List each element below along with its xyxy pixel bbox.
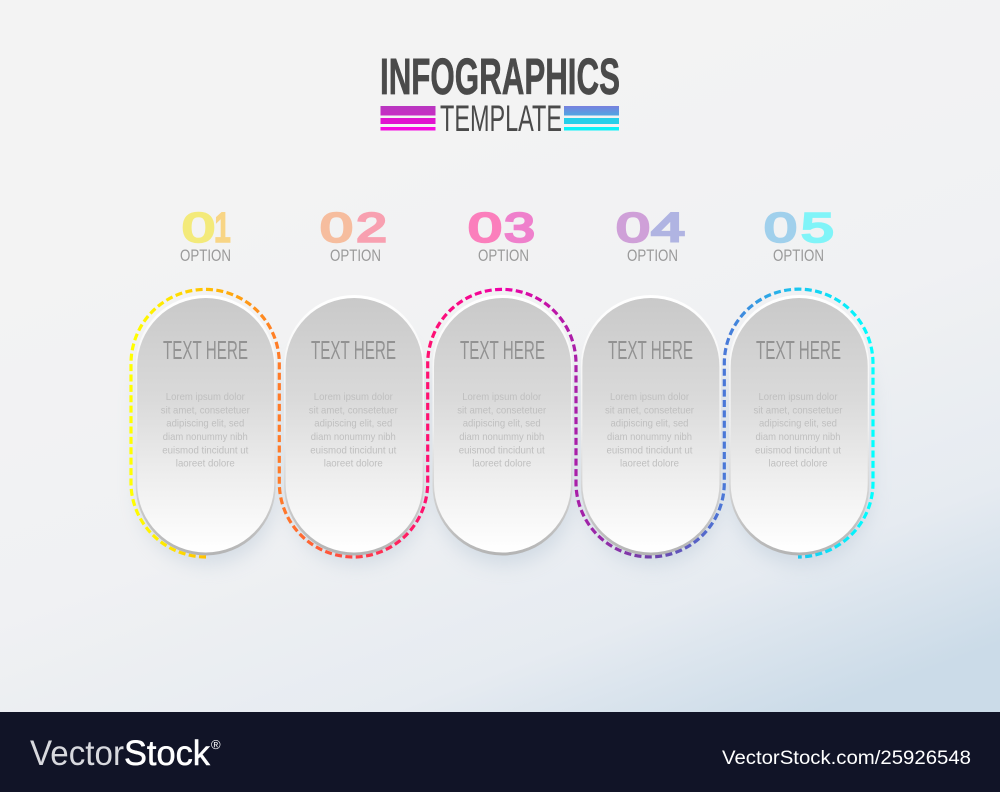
body text 3: Lorem ipsum dolor [462,391,542,403]
body text 1: sit amet, consetetuer [161,404,250,416]
footer logo: Stock [124,734,210,773]
option 02: 2 [356,205,387,251]
option 03 [468,205,535,265]
body text 5 [754,391,843,470]
option 01: 0 [182,205,215,251]
body text 2: euismod tincidunt ut [310,444,396,456]
registered mark: ® [211,737,221,752]
body text 1: laoreet dolore [176,458,235,470]
panel: capsule 1 [136,295,276,556]
footer bar [0,712,1000,792]
option 04: 4 [651,205,685,251]
body text 5: euismod tincidunt ut [755,444,841,456]
body text 4: diam nonummy nibh [607,431,692,443]
heading 1: TEXT HERE [163,335,248,365]
title [380,48,620,139]
body text 2: laoreet dolore [324,458,383,470]
dashed connector line [131,289,873,557]
body text 2: adipiscing elit, sed [314,418,392,430]
panel: capsule 2 [284,295,424,556]
body text 2: sit amet, consetetuer [309,404,398,416]
body text 4: euismod tincidunt ut [606,444,693,456]
body text 4 [605,391,694,470]
body text 5: diam nonummy nibh [756,431,841,443]
option 02: OPTION [330,247,381,265]
subtitle: template: TEMPLATE [440,98,562,139]
heading 2: TEXT HERE [311,335,396,365]
option labels [180,205,834,265]
heading 4: TEXT HERE [608,335,693,365]
option 05: 5 [801,205,834,251]
body text 2 [309,391,398,470]
option 03: 0 [468,205,502,251]
body text 4: Lorem ipsum dolor [610,391,689,403]
option 01: 1 [214,205,231,251]
body text 4: sit amet, consetetuer [605,404,694,416]
option 03: OPTION [478,247,529,265]
footer logo [30,734,210,773]
option 05 [764,205,834,265]
body text 5: adipiscing elit, sed [759,418,837,430]
title: infographics: INFOGRAPHICS [380,48,620,105]
panel: capsule 4 [581,295,721,556]
capsule shadows [139,330,870,564]
option 04 [616,205,685,265]
panel: capsule 5 [729,295,869,556]
body text 3: diam nonummy nibh [459,431,544,443]
body text 5: laoreet dolore [768,458,828,470]
heading 5: TEXT HERE [756,335,841,365]
left title stripes [380,106,436,130]
body text 3: sit amet, consetetuer [457,404,547,416]
option 01: OPTION [180,247,231,265]
option 04: 0 [616,205,650,251]
option 05: OPTION [773,247,824,265]
footer logo: Vector [30,734,124,773]
body text 5: Lorem ipsum dolor [758,391,838,403]
body text 1: euismod tincidunt ut [162,444,248,456]
heading 3: TEXT HERE [460,335,545,365]
option 04: OPTION [627,247,678,265]
body text 4: laoreet dolore [620,458,679,470]
body text 1: diam nonummy nibh [163,431,248,443]
footer image id: VectorStock.com/25926548 [722,747,971,769]
option 03: 3 [504,205,535,251]
body text 4: adipiscing elit, sed [610,418,689,430]
option 02: 0 [320,205,353,251]
option 01 [180,205,231,265]
body text 3: adipiscing elit, sed [463,418,541,430]
body text 1 [161,391,250,470]
option 02 [320,205,387,265]
body text 5: sit amet, consetetuer [754,404,843,416]
body text 3 [457,391,547,470]
body text 2: Lorem ipsum dolor [314,391,393,403]
body text 1: adipiscing elit, sed [166,418,244,430]
body text 1: Lorem ipsum dolor [166,391,245,403]
body text 3: laoreet dolore [472,458,531,470]
option 05: 0 [764,205,797,251]
right title stripes [564,106,619,130]
panel: capsule 3 [432,295,572,556]
body text 2: diam nonummy nibh [311,431,396,443]
body text 3: euismod tincidunt ut [459,444,545,456]
